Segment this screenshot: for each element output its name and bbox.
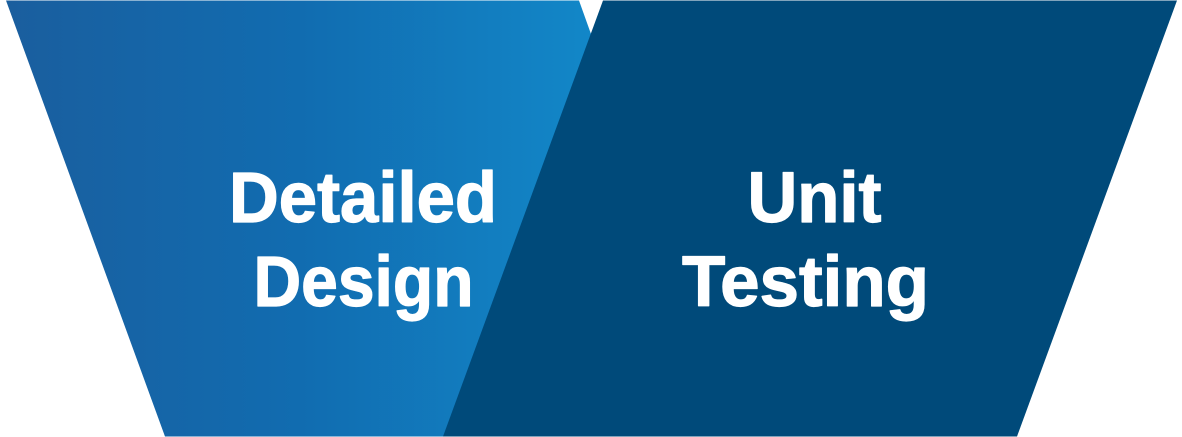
text: Detailed Design: Design [254,243,474,322]
text: Detailed Design: Detailed [229,159,497,238]
panel: unit testing [443,0,1177,436]
text: Unit Testing: Unit [748,159,882,238]
text: Unit Testing [682,159,929,322]
text: Unit Testing: Testing [682,243,929,322]
text: Detailed Design [229,159,497,322]
panel: detailed design [6,0,735,436]
